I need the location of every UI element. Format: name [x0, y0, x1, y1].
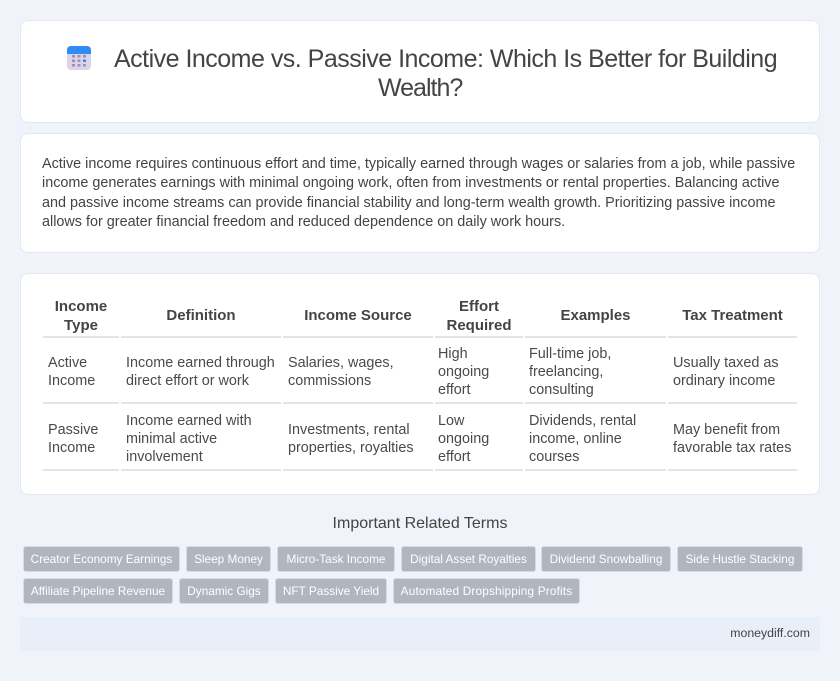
intro text: allows for greater financial freedom and reduced dependence on daily work hours. — [42, 214, 565, 230]
table header: Definition — [166, 307, 236, 324]
table row: passive income: ongoing — [438, 431, 489, 447]
table row: active income: effort — [438, 382, 471, 398]
table row: passive income: income, online — [529, 431, 622, 447]
panel: introduction — [20, 133, 820, 253]
intro text: and passive income streams can provide financial stability and long-term wealth growth. Prioritizing passive income — [42, 195, 775, 211]
intro text — [42, 156, 795, 230]
table row: active income: consulting — [529, 382, 594, 398]
table row: active income: ongoing — [438, 364, 489, 380]
table row: active income: commissions — [288, 373, 371, 389]
related term tags: Micro-Task Income — [286, 552, 385, 566]
table header: Tax Treatment — [682, 307, 783, 324]
table row: passive income: involvement — [126, 449, 203, 465]
footer: moneydiff.com — [730, 626, 810, 640]
table row: active income: freelancing, — [529, 364, 603, 380]
table row: active income: Income — [48, 373, 95, 389]
table row: active income: Full-time job, — [529, 346, 611, 362]
related term tags: Side Hustle Stacking — [686, 552, 794, 566]
table row: active income: ordinary income — [673, 373, 775, 389]
table header: Effort — [459, 298, 499, 315]
table row: passive income: Income — [48, 440, 95, 456]
table row: active income: direct effort or work — [126, 373, 249, 389]
table row: passive income: Low — [438, 413, 464, 429]
table row: passive income: favorable tax rates — [673, 440, 791, 456]
table header: Income — [55, 298, 107, 315]
table row: active income: Salaries, wages, — [288, 355, 394, 371]
panel: comparison table — [20, 273, 820, 495]
header card — [20, 20, 820, 123]
table header: Type — [64, 317, 98, 334]
table header — [43, 298, 797, 338]
title: Active Income vs. Passive Income: Which Is Better for Building — [114, 45, 777, 73]
table row: passive income: effort — [438, 449, 471, 465]
table row: passive income — [43, 413, 797, 471]
related term tags: Sleep Money — [194, 552, 263, 566]
related term tags: Automated Dropshipping Profits — [401, 584, 572, 598]
table row: passive income: May benefit from — [673, 422, 780, 438]
table row: active income: High — [438, 346, 468, 362]
table row: passive income: Investments, rental — [288, 422, 410, 438]
icon: calendar — [67, 46, 91, 70]
table row: passive income: properties, royalties — [288, 440, 414, 456]
table row: passive income: Income earned with — [126, 413, 252, 429]
related term tags: Affiliate Pipeline Revenue — [31, 584, 165, 598]
table header: Income Source — [304, 307, 412, 324]
title — [114, 45, 777, 102]
footer — [20, 617, 820, 651]
intro text: income generates earnings with minimal ongoing work, often from investments or rental properties. Balancing active — [42, 175, 780, 191]
related term tags: Creator Economy Earnings — [31, 552, 172, 566]
table header: Required — [446, 317, 512, 334]
related term tags: Dynamic Gigs — [187, 584, 261, 598]
related term tags: Dividend Snowballing — [550, 552, 662, 566]
table row: passive income: minimal active — [126, 431, 217, 447]
table row: passive income: Passive — [48, 422, 98, 438]
related terms heading: Important Related Terms — [333, 515, 507, 532]
title: Wealth? — [378, 74, 462, 102]
intro text: Active income requires continuous effort and time, typically earned through wages or salaries from a job, while passive — [42, 156, 795, 172]
table row: active income: Active — [48, 355, 87, 371]
table row: active income: Income earned through — [126, 355, 275, 371]
table row: active income: Usually taxed as — [673, 355, 779, 371]
table row: passive income: courses — [529, 449, 579, 465]
related term tags: NFT Passive Yield — [283, 584, 379, 598]
related term tags — [23, 546, 803, 604]
table header: Examples — [560, 307, 631, 324]
table row: passive income: Dividends, rental — [529, 413, 636, 429]
table row: active income — [43, 346, 797, 404]
related term tags: Digital Asset Royalties — [410, 552, 527, 566]
